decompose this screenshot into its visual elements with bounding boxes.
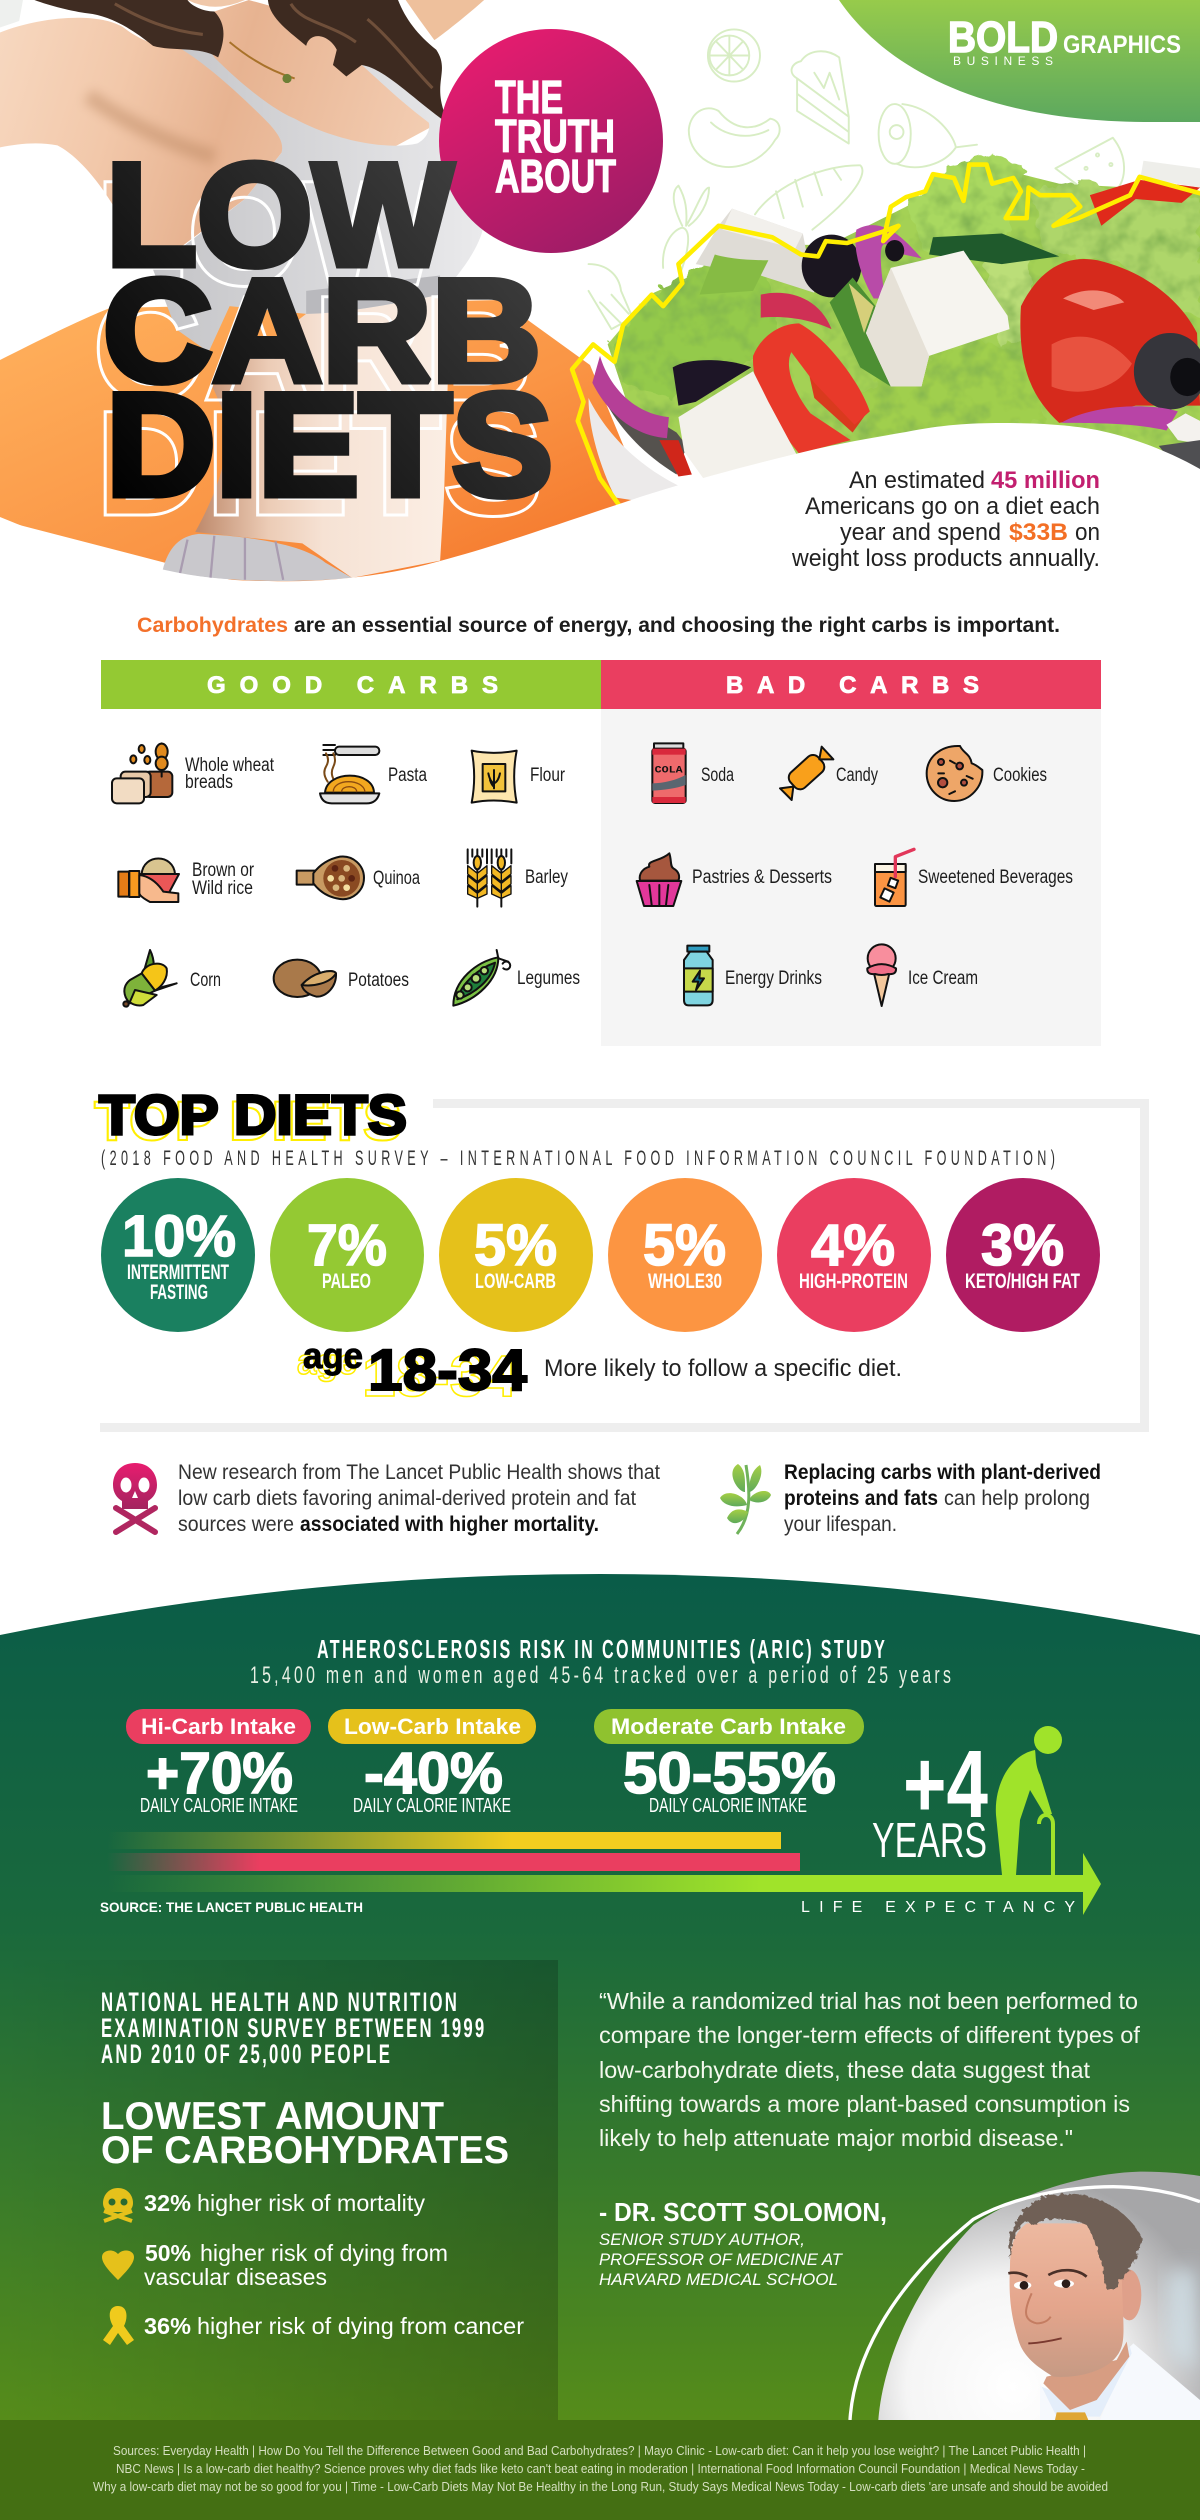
icon: ice cream — [589, 264, 633, 329]
panel: hero — [0, 0, 1200, 610]
stat: low-carb: -40% — [364, 1741, 503, 1806]
panel: nhanes survey: NATIONAL HEALTH AND NUTRITION — [101, 1987, 457, 2017]
intro text: 45 million — [991, 467, 1100, 494]
bad carbs header — [601, 660, 1101, 709]
study subheading: 15,400 men and women aged 45-64 tracked over a period of 25 years — [250, 1663, 951, 1689]
heading: TOP DIETS — [99, 1083, 407, 1146]
good carb labels: Pasta — [388, 765, 427, 786]
quote attribution: PROFESSOR OF MEDICINE AT — [599, 2250, 844, 2269]
quote — [599, 1988, 1141, 2151]
callout: plant-derived: can help prolong — [944, 1487, 1090, 1510]
stat: hi-carb: Hi-Carb Intake — [141, 1714, 296, 1739]
icon: lemon — [708, 29, 760, 82]
icon: bread — [112, 743, 172, 803]
bad carb labels: Cookies — [993, 765, 1047, 786]
logo badge — [839, 0, 1200, 122]
bad carb labels: Soda — [701, 765, 734, 786]
survey heading: OF CARBOHYDRATES — [101, 2129, 509, 2172]
stat: intermittent fasting: INTERMITTENT — [127, 1261, 229, 1284]
stat: paleo: PALEO — [322, 1270, 371, 1293]
risk: mortality — [103, 2188, 425, 2221]
good carb labels: breads — [185, 772, 233, 793]
logo badge: BUSINESS — [953, 54, 1053, 68]
bad carb labels: Energy Drinks — [725, 968, 822, 989]
yellow salad outline — [572, 165, 1200, 505]
intro text: An estimated — [849, 467, 985, 494]
plus four years: +4 — [903, 1731, 988, 1838]
bad carb labels — [692, 765, 1073, 989]
panel: good carbs and bad carbs — [101, 660, 1101, 1046]
stat: high-protein: 4% — [811, 1213, 895, 1278]
title outline — [92, 149, 544, 547]
quote: “While a randomized trial has not been performed to — [599, 1988, 1138, 2014]
arrow: life expectancy — [107, 1853, 1101, 1915]
stat: paleo: 7% — [307, 1213, 387, 1278]
food line drawings — [589, 29, 1124, 329]
icon: pink skull — [113, 1463, 157, 1532]
plus four years: YEARS — [872, 1814, 987, 1868]
icon: cupcake — [637, 853, 681, 906]
age callout: 18-34 — [362, 1344, 517, 1409]
icon: cookie — [927, 746, 982, 801]
study heading: ATHEROSCLEROSIS RISK IN COMMUNITIES (ARIC) STUDY — [317, 1634, 885, 1664]
survey heading — [101, 2095, 509, 2172]
stat: low-carb: Low-Carb Intake — [344, 1714, 521, 1739]
survey heading: LOWEST AMOUNT — [101, 2095, 444, 2138]
plus four years — [872, 1731, 988, 1868]
icon: potatoes — [274, 960, 336, 997]
stat: whole30: 5% — [643, 1213, 726, 1278]
quote attribution: SENIOR STUDY AUTHOR, — [599, 2230, 805, 2249]
stat: moderate carb: DAILY CALORIE INTAKE — [649, 1795, 807, 1817]
footer sources: Sources: Everyday Health | How Do You Tell the Difference Between Good and Bad Carbohydrates? | Mayo Clinic - Low-carb diet: Can it help you lose weight? | The Lancet Public Health | — [113, 2443, 1086, 2458]
icon: quinoa — [297, 856, 364, 899]
icon: ham — [879, 104, 977, 167]
risk: vascular: vascular diseases — [144, 2264, 327, 2290]
icon: leaf sprig — [720, 1464, 771, 1534]
bad carb icons — [637, 743, 982, 1006]
stat: low-carb — [328, 1709, 536, 1817]
quote: compare the longer-term effects of different types of — [599, 2022, 1141, 2048]
stat: whole30: WHOLE30 — [648, 1270, 722, 1293]
icon: soda — [652, 743, 686, 803]
callout: plant-derived — [720, 1461, 1101, 1536]
bad carbs background — [601, 709, 1101, 1046]
woman photo illustration — [0, 0, 484, 581]
heading outline: TOP DIETS — [94, 1089, 402, 1152]
bad carb labels: Candy — [836, 765, 878, 786]
risk: vascular: higher risk of dying from — [200, 2240, 448, 2266]
panel: green study section — [0, 1574, 1200, 2420]
quote: shifting towards a more plant-based consumption is — [599, 2091, 1130, 2117]
callout: higher mortality: associated with higher mortality. — [300, 1513, 599, 1536]
stat: hi-carb — [126, 1709, 311, 1817]
icon: brown rice — [118, 858, 179, 902]
salad bowl photo illustration — [589, 153, 1200, 501]
bad carb labels: Sweetened Beverages — [918, 867, 1073, 888]
stat: keto: 3% — [981, 1213, 1064, 1278]
good carb labels: Quinoa — [373, 868, 420, 889]
age callout: More likely to follow a specific diet. — [544, 1355, 902, 1382]
doctor portrait — [850, 2172, 1200, 2420]
stat: low-carb: LOW-CARB — [475, 1270, 556, 1293]
title: LOW — [106, 133, 453, 296]
title: CARB — [103, 249, 541, 412]
stat: moderate carb — [594, 1709, 864, 1817]
icon: carrot — [663, 186, 709, 287]
stat: moderate carb: 50-55% — [623, 1741, 836, 1806]
age callout: age — [303, 1335, 363, 1376]
good carb labels: Corn — [190, 970, 221, 991]
pink circle with tagline — [439, 29, 663, 253]
icon: sweetened beverage — [875, 849, 914, 906]
good carb labels: Potatoes — [348, 970, 409, 991]
title outline: CARB — [92, 264, 533, 432]
quote attribution — [599, 2197, 887, 2289]
good carbs header — [101, 660, 601, 709]
subtitle: (2018 FOOD AND HEALTH SURVEY – INTERNATIONAL FOOD INFORMATION COUNCIL FOUNDATION) — [101, 1146, 1055, 1170]
intro text: weight loss products annually. — [791, 545, 1100, 572]
pink circle with tagline: TRUTH — [495, 110, 615, 162]
carbohydrates statement: Carbohydrates — [137, 614, 288, 637]
callout: plant-derived: Replacing carbs with plant-derived — [784, 1461, 1101, 1484]
icon: flour — [472, 751, 517, 803]
panel: nhanes survey: EXAMINATION SURVEY BETWEEN 1999 — [101, 2013, 484, 2043]
age callout: age — [297, 1341, 357, 1382]
quote: low-carbohydrate diets, these data suggest that — [599, 2057, 1091, 2083]
good carb labels: Legumes — [517, 968, 580, 989]
good carb labels: Brown or — [192, 860, 255, 881]
bad carb labels: Ice Cream — [908, 968, 978, 989]
bad carbs header: BAD CARBS — [726, 672, 979, 699]
risk: cancer: higher risk of dying from cancer — [197, 2313, 524, 2339]
footer sources: Why a low-carb diet may not be so good for you | Time - Low-Carb Diets May Not Be Healthy in the Long Run, Study Says Medical News Today - Low-carb diets 'are unsafe and should be avoided — [93, 2479, 1108, 2494]
logo badge: BOLD — [948, 13, 1058, 62]
stat: hi-carb: +70% — [146, 1741, 293, 1806]
logo badge: GRAPHICS — [1063, 31, 1181, 59]
frame — [100, 1099, 1149, 1432]
callout: higher mortality: New research from The Lancet Public Health shows that — [178, 1461, 660, 1484]
stat: hi-carb: DAILY CALORIE INTAKE — [140, 1795, 298, 1817]
orange blob — [0, 300, 650, 590]
bad carb labels: Pastries & Desserts — [692, 867, 832, 888]
stat: intermittent fasting: 10% — [122, 1204, 236, 1269]
risk: cancer — [103, 2306, 524, 2345]
good carb labels — [185, 755, 580, 991]
risk: vascular — [102, 2240, 448, 2290]
icon: pasta — [320, 745, 379, 803]
icon: cake — [792, 51, 849, 144]
carbohydrates statement: are an essential source of energy, and choosing the right carbs is important. — [294, 614, 1060, 637]
stat: moderate carb: Moderate Carb Intake — [611, 1714, 846, 1739]
icon: soda: COLA — [655, 765, 683, 776]
callout: plant-derived: proteins and fats — [784, 1487, 938, 1510]
quote: likely to help attenuate major morbid disease." — [599, 2125, 1073, 2151]
intro text: on — [1075, 519, 1100, 546]
good carb labels: Whole wheat — [185, 755, 275, 776]
age callout: 18-34 — [368, 1338, 527, 1403]
stat: paleo — [270, 1178, 424, 1332]
risk: mortality: higher risk of mortality — [197, 2190, 425, 2216]
callout: higher mortality: sources were — [178, 1513, 294, 1536]
stat: high-protein — [777, 1178, 931, 1332]
footer sources — [0, 2420, 1200, 2520]
panel: top diets — [94, 1083, 1149, 1432]
quote attribution: - DR. SCOTT SOLOMON, — [599, 2197, 887, 2227]
icon: baguette — [755, 165, 862, 230]
icon: corn — [123, 950, 177, 1007]
title: DIETS — [106, 363, 553, 526]
source note: SOURCE: THE LANCET PUBLIC HEALTH — [100, 1899, 363, 1915]
stat: intermittent fasting — [101, 1178, 255, 1332]
risk: mortality: 32% — [144, 2190, 191, 2216]
good carb labels: Wild rice — [192, 878, 253, 899]
life expectancy label: LIFE EXPECTANCY — [801, 1899, 1075, 1916]
footer sources: NBC News | Is a low-carb diet healthy? Science proves why diet fads like keto can't beat eating in moderation | International Food Information Council Foundation | Medical News Today - — [116, 2461, 1085, 2476]
icon: elderly figure — [996, 1726, 1062, 1875]
stat: keto — [946, 1178, 1100, 1332]
good carb labels: Flour — [530, 765, 566, 786]
stat: intermittent fasting: FASTING — [150, 1281, 208, 1304]
icon: watermelon — [1055, 138, 1124, 191]
intro text: Americans go on a diet each — [805, 493, 1100, 520]
icon: ice cream — [867, 944, 896, 1006]
risk: cancer: 36% — [144, 2313, 191, 2339]
stat: low-carb: 5% — [474, 1213, 557, 1278]
pink circle with tagline: ABOUT — [495, 150, 616, 202]
stat: high-protein: HIGH-PROTEIN — [799, 1270, 908, 1293]
quote attribution: HARVARD MEDICAL SCHOOL — [599, 2270, 838, 2289]
age callout — [297, 1335, 902, 1409]
panel: nhanes survey — [0, 1960, 558, 2420]
risk: vascular: 50% — [145, 2240, 191, 2266]
intro text — [791, 467, 1100, 572]
title outline: LOW — [95, 149, 444, 317]
icon: hot dog — [689, 108, 780, 167]
white wave — [0, 423, 1200, 610]
good carbs header: GOOD CARBS — [207, 672, 498, 699]
icon: barley — [468, 849, 511, 907]
good carb labels: Barley — [525, 867, 568, 888]
stat: keto: KETO/HIGH FAT — [965, 1270, 1080, 1293]
icon: energy drink — [684, 946, 713, 1005]
icon: legumes — [453, 950, 510, 1006]
callout: higher mortality — [113, 1461, 660, 1536]
good carb icons — [112, 743, 517, 1007]
pink circle with tagline: THE — [495, 71, 563, 123]
bar: hi-carb — [107, 1853, 800, 1871]
bar: low-carb — [107, 1832, 781, 1849]
stat: low-carb: DAILY CALORIE INTAKE — [353, 1795, 511, 1817]
intro text: $33B — [1009, 519, 1068, 546]
panel: nhanes survey: AND 2010 OF 25,000 PEOPLE — [101, 2039, 390, 2069]
stat: low-carb — [439, 1178, 593, 1332]
callout: plant-derived: your lifespan. — [784, 1513, 897, 1536]
title outline: DIETS — [95, 379, 544, 547]
callout: higher mortality: low carb diets favoring animal-derived protein and fat — [178, 1487, 636, 1510]
icon: candy — [780, 747, 833, 800]
stat: whole30 — [608, 1178, 762, 1332]
intro text: year and spend — [840, 519, 1001, 546]
title — [103, 133, 553, 526]
